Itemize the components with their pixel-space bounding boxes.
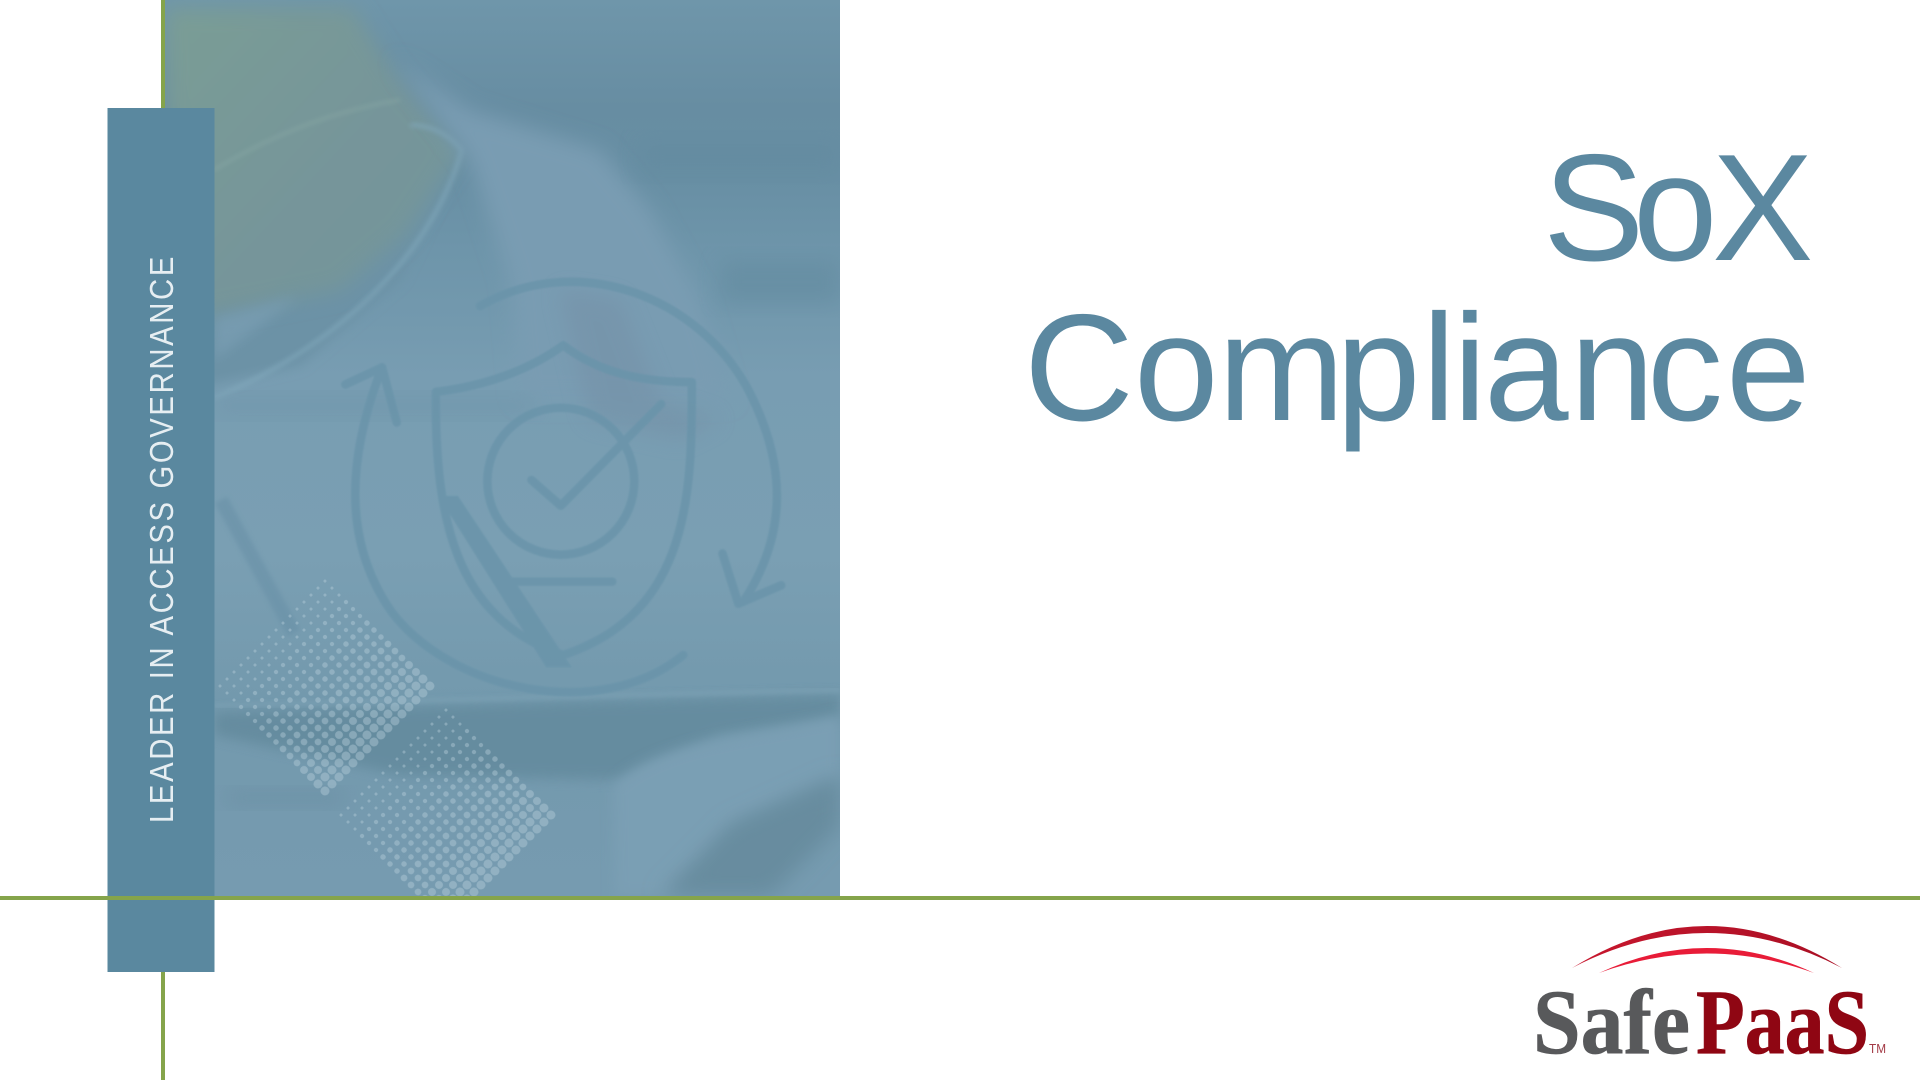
trademark: TM	[1869, 1041, 1886, 1056]
inner arc	[1599, 948, 1814, 973]
wordmark: Safe	[1533, 971, 1690, 1073]
vertical side bar	[108, 108, 214, 972]
halftone diamond 1	[213, 574, 437, 798]
outer arc	[1572, 926, 1842, 968]
logo: SafePaaS: PaaS	[1696, 971, 1869, 1073]
blurred hand	[214, 60, 840, 440]
halftone diamond 2	[340, 708, 556, 896]
green horizontal line	[0, 896, 1920, 900]
icon: shield with check and circular arrows	[345, 282, 781, 692]
title	[1024, 123, 1813, 453]
side bar text: LEADER IN ACCESS GOVERNANCE	[143, 254, 180, 823]
background photo panel	[165, 0, 840, 927]
title line 2: Compliance	[1024, 283, 1811, 453]
title line 1: SoX	[1543, 123, 1813, 293]
lower tablet and hand shadows	[214, 500, 840, 896]
green vertical line	[161, 0, 165, 1080]
blurred dish in green tint	[165, 8, 462, 398]
logo: SafePaaS	[1533, 926, 1886, 1073]
